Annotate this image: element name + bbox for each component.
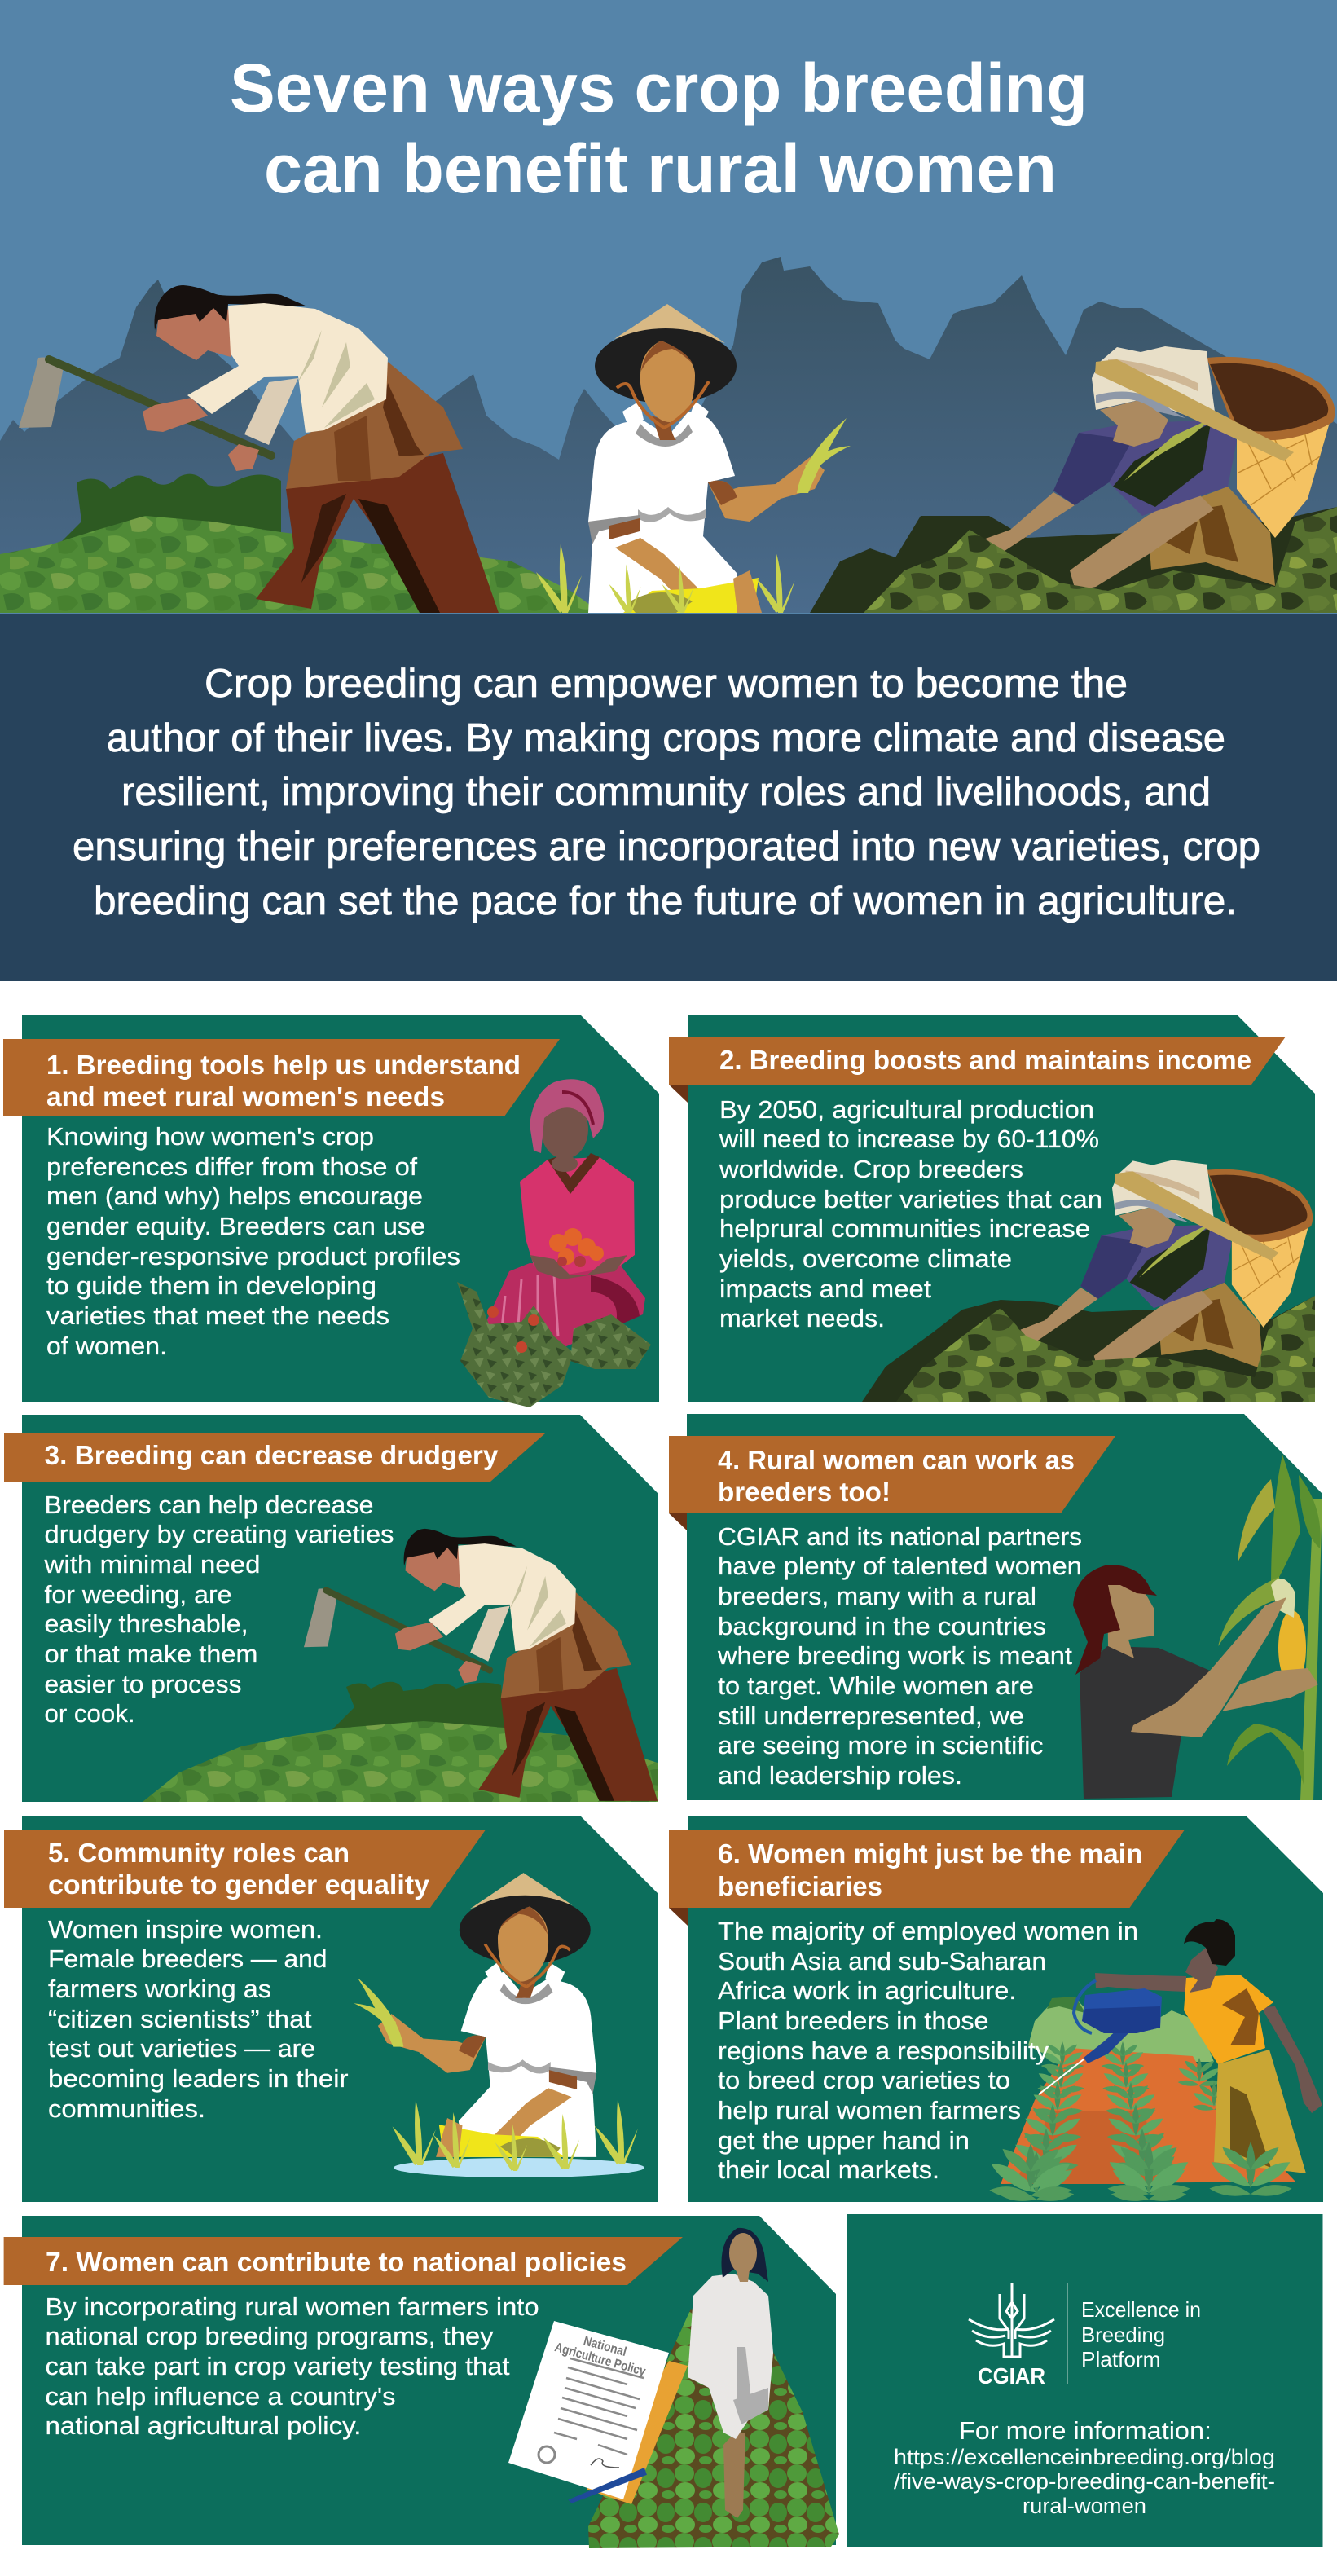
main title: [230, 50, 1088, 207]
body text 3: drudgery by creating varieties: [44, 1520, 394, 1548]
body text 6: their local markets.: [718, 2155, 939, 2184]
platform name: Breeding: [1081, 2323, 1165, 2347]
body text 2: [719, 1095, 1102, 1332]
body text 1: of women.: [46, 1332, 167, 1360]
panel 6: main beneficiaries: [669, 1816, 1323, 2202]
body text 2: helprural communities increase: [719, 1214, 1090, 1243]
sky background: [0, 0, 1337, 614]
more information: https://excellenceinbreeding.org/blog: [894, 2445, 1275, 2469]
body text 4: and leadership roles.: [718, 1761, 962, 1790]
illustration: policy document and pen: [508, 2321, 688, 2504]
intro text: resilient, improving their community roles and livelihoods, and: [121, 770, 1211, 814]
ribbon heading 4: breeders too!: [718, 1477, 891, 1507]
body text 7: By incorporating rural women farmers into: [46, 2292, 539, 2321]
ribbon heading 7: [4, 2237, 683, 2285]
body text 6: [718, 1917, 1138, 2184]
illustration: woman breeder: [1073, 1565, 1318, 1799]
body text 6: to breed crop varieties to: [718, 2066, 1010, 2094]
body text 2: produce better varieties that can: [719, 1185, 1102, 1213]
body text 6: Africa work in agriculture.: [718, 1976, 1017, 2005]
more information: rural-women: [1023, 2494, 1146, 2518]
intro text: Crop breeding can empower women to become the: [205, 662, 1128, 706]
body text 5: Female breeders — and: [48, 1944, 328, 1973]
body text 4: CGIAR and its national partners: [718, 1522, 1082, 1551]
body text 1: men (and why) helps encourage: [46, 1182, 423, 1210]
illustration: woman with basket in tea bush: [862, 1160, 1315, 1402]
main title: can benefit rural women: [264, 130, 1057, 207]
panel 7: national policies: [4, 2216, 839, 2548]
panel 1: breeding tools: [3, 1015, 659, 1407]
body text 2: worldwide. Crop breeders: [719, 1155, 1023, 1183]
body text 7: national crop breeding programs, they: [46, 2322, 494, 2350]
ribbon heading 1: [3, 1039, 560, 1116]
panel 5: community roles: [4, 1816, 658, 2202]
body text 1: to guide them in developing: [46, 1271, 376, 1300]
body text 2: By 2050, agricultural production: [719, 1095, 1094, 1124]
right bush foreground: [864, 507, 1337, 613]
ribbon heading 3: [4, 1433, 545, 1482]
ribbon heading 4: [669, 1436, 1115, 1530]
body text 6: regions have a responsibility: [718, 2037, 1049, 2065]
body text 4: still underrepresented, we: [718, 1702, 1024, 1730]
body text 4: to target. While women are: [718, 1671, 1034, 1700]
body text 2: impacts and meet: [719, 1275, 931, 1303]
body text 2: will need to increase by 60-110%: [719, 1125, 1099, 1153]
body text 1: preferences differ from those of: [46, 1152, 417, 1181]
ribbon heading 4: 4. Rural women can work as: [718, 1445, 1075, 1475]
body text 7: national agricultural policy.: [46, 2411, 362, 2440]
panel 2: income: [669, 1015, 1315, 1402]
body text 2: yields, overcome climate: [719, 1244, 1012, 1273]
ribbon heading 3: 3. Breeding can decrease drudgery: [44, 1440, 499, 1470]
body text 5: test out varieties — are: [48, 2034, 315, 2063]
body text 3: easily threshable,: [44, 1609, 248, 1638]
intro text: author of their lives. By making crops more climate and disease: [107, 716, 1225, 760]
body text 4: where breeding work is meant: [717, 1641, 1072, 1670]
body text 7: [46, 2292, 539, 2440]
body text 4: are seeing more in scientific: [718, 1731, 1043, 1759]
body text 4: background in the countries: [718, 1612, 1046, 1640]
ribbon heading 2: [669, 1037, 1286, 1103]
body text 5: “citizen scientists” that: [48, 2005, 312, 2033]
body text 7: can help influence a country's: [46, 2382, 396, 2411]
illustration: corn plant: [1218, 1455, 1322, 1800]
body text 5: [48, 1915, 349, 2123]
platform name: Excellence in: [1081, 2297, 1201, 2322]
body text 2: market needs.: [719, 1304, 885, 1332]
intro text: [73, 662, 1260, 923]
main title: Seven ways crop breeding: [230, 50, 1088, 126]
more information: For more information:: [959, 2416, 1212, 2445]
panel 8: CGIAR info: [847, 2214, 1323, 2547]
body text 6: help rural women farmers: [718, 2096, 1021, 2125]
illustration: grass and woman in conical hat: [536, 304, 851, 613]
document title: [553, 2327, 651, 2379]
illustration: woman in paddy: [354, 1873, 644, 2177]
body text 5: becoming leaders in their: [48, 2064, 349, 2093]
ribbon heading 6: beneficiaries: [718, 1871, 882, 1901]
body text 5: Women inspire women.: [48, 1915, 323, 1944]
body text 6: South Asia and sub-Saharan: [718, 1947, 1046, 1975]
body text 3: or cook.: [44, 1699, 135, 1728]
ribbon heading 6: 6. Women might just be the main: [718, 1838, 1142, 1869]
body text 4: [717, 1522, 1082, 1790]
panel 4: women as breeders: [669, 1414, 1322, 1800]
body text 1: gender equity. Breeders can use: [46, 1212, 425, 1240]
document title: National: [582, 2334, 628, 2359]
body text 4: have plenty of talented women: [718, 1552, 1082, 1580]
body text 1: Knowing how women's crop: [46, 1122, 374, 1151]
platform name: Platform: [1081, 2347, 1160, 2371]
ribbon heading 7: 7. Women can contribute to national policies: [46, 2247, 627, 2277]
body text 3: easier to process: [44, 1670, 241, 1698]
body text 1: gender-responsive product profiles: [46, 1242, 460, 1270]
mountains silhouette: [0, 257, 1337, 613]
illustration: field and woman: [588, 2228, 839, 2548]
body text 3: or that make them: [44, 1640, 257, 1668]
illustration: woman with basket: [973, 346, 1335, 591]
ribbon heading 1: and meet rural women's needs: [46, 1081, 445, 1112]
body text 3: with minimal need: [43, 1550, 261, 1579]
illustration: woman with hoe: [19, 285, 499, 613]
intro text: ensuring their preferences are incorporated into new varieties, crop: [73, 825, 1260, 869]
header panel with illustration: [0, 0, 1337, 614]
intro text: breeding can set the pace for the future of women in agriculture.: [94, 879, 1237, 923]
illustration: woman hoeing in crop: [143, 1529, 658, 1802]
body text 5: farmers working as: [48, 1975, 271, 2003]
ribbon heading 5: [4, 1830, 486, 1908]
ribbon heading 5: contribute to gender equality: [48, 1869, 430, 1900]
body text 4: breeders, many with a rural: [718, 1582, 1036, 1610]
more information: /five-ways-crop-breeding-can-benefit-: [894, 2469, 1275, 2494]
illustration: woman watering crop rows: [989, 1919, 1322, 2201]
panel 3: drudgery: [4, 1415, 658, 1802]
body text 1: [46, 1122, 460, 1360]
intro band: [0, 614, 1337, 981]
ribbon heading 2: 2. Breeding boosts and maintains income: [719, 1045, 1251, 1075]
more information: [894, 2416, 1275, 2518]
body text 6: Plant breeders in those: [718, 2006, 989, 2035]
illustration: woman with tomatoes: [457, 1079, 651, 1407]
body text 7: can take part in crop variety testing that: [46, 2352, 510, 2380]
left bush: [0, 474, 601, 613]
body text 3: Breeders can help decrease: [44, 1491, 374, 1519]
ribbon heading 1: 1. Breeding tools help us understand: [46, 1050, 521, 1080]
right bush behind: [810, 507, 1337, 613]
body text 6: get the upper hand in: [718, 2126, 970, 2155]
body text 3: [43, 1491, 394, 1728]
ribbon heading 6: [669, 1830, 1185, 1926]
body text 3: for weeding, are: [44, 1580, 231, 1609]
ribbon heading 5: 5. Community roles can: [48, 1838, 350, 1868]
document title: Agriculture Policy: [553, 2340, 647, 2379]
platform name: [1081, 2297, 1201, 2371]
body text 5: communities.: [48, 2094, 205, 2123]
logo wordmark: CGIAR: [978, 2363, 1045, 2389]
logo: CGIAR mark: [969, 2283, 1054, 2389]
body text 6: The majority of employed women in: [718, 1917, 1138, 1945]
body text 1: varieties that meet the needs: [46, 1301, 389, 1330]
